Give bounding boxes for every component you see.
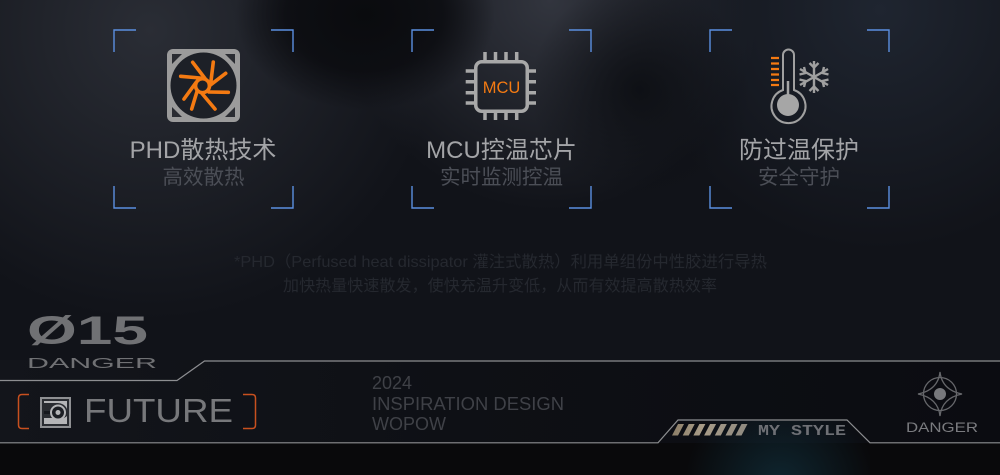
tab: my style [672,424,846,440]
hazard stripes [672,424,748,436]
label: DANGER [906,420,978,435]
logo group: FUTURE [18,392,256,429]
subheading: 高效散热 [162,166,244,189]
panel: MCU控温芯片 [412,30,591,208]
corner brackets [114,30,293,208]
wordmark: FUTURE [84,392,233,429]
subheading: 安全守护 [758,166,840,189]
orange brackets [18,394,256,428]
icon: MCU chip [466,52,536,120]
heading: 防过温保护 [739,137,859,164]
icon: danger compass [906,372,978,435]
badge: 015 danger: Ø15 [27,309,148,353]
label: MY STYLE [758,424,846,440]
corner brackets [710,30,889,208]
text block: 2024 inspiration design: WOPOW [372,414,446,434]
text block: 2024 inspiration design: 2024 [372,373,412,393]
footnote: 加快热量快速散发，使快充温升变低，从而有效提高散热效率 [283,277,717,295]
heading: MCU控温芯片 [426,137,577,164]
badge: 015 danger [27,309,157,372]
text block: 2024 inspiration design: INSPIRATION DESIGN [372,394,564,414]
icon: thermometer with snowflake [771,50,828,123]
heading: PHD散热技术 [130,137,276,164]
subheading: 实时监测控温 [440,166,563,189]
panel: 防过温保护 [710,30,889,208]
text block: 2024 inspiration design [372,373,564,434]
footnote: *PHD（Perfused heat dissipator 灌注式散热）利用单组份中性胶进行导热 [234,253,767,271]
icon: cooling fan [167,49,240,122]
badge: 015 danger: DANGER [27,355,157,372]
icon: logo square [41,398,70,427]
panel: PHD散热技术 [114,30,293,208]
icon: MCU chip: MCU [483,79,520,97]
corner brackets [412,30,591,208]
footer frame lines [0,361,1000,443]
footnote [234,253,767,295]
